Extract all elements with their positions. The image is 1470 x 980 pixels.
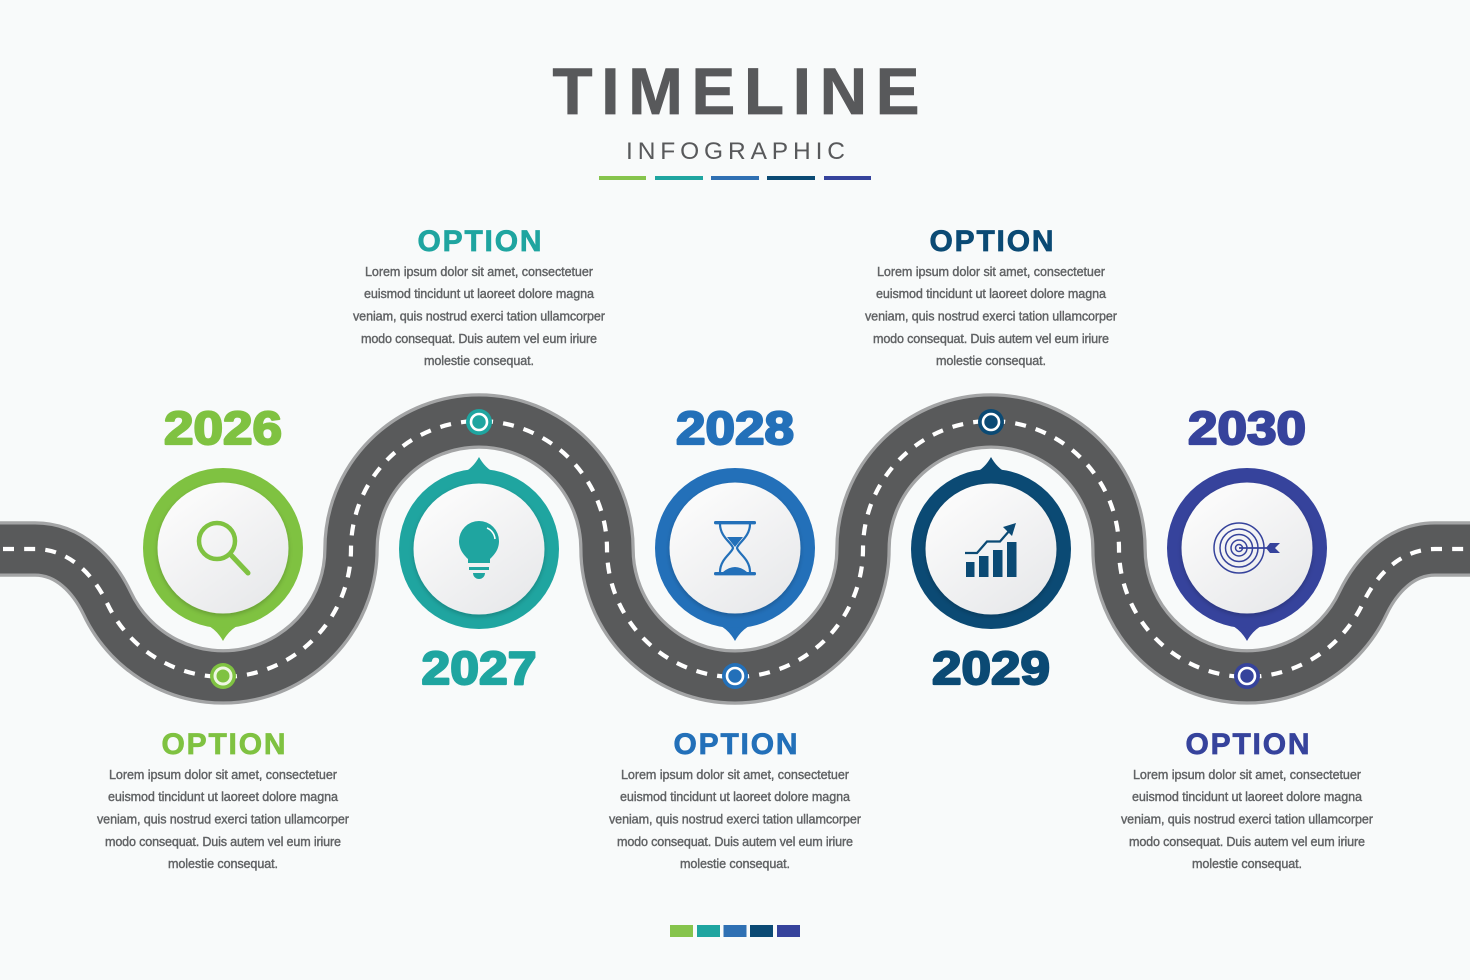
text block: option 2030: OPTION (1186, 728, 1310, 761)
text block: option 2029 (865, 225, 1117, 368)
text block: option 2030: modo consequat. Duis autem vel eum iriure (1129, 835, 1365, 849)
text block: option 2026: modo consequat. Duis autem vel eum iriure (105, 835, 341, 849)
text block: option 2028: Lorem ipsum dolor sit amet, consectetuer (621, 768, 849, 782)
text block: option 2030: veniam, quis nostrud exerci tation ullamcorper (1121, 812, 1373, 826)
year 2029: 2029 (932, 642, 1050, 694)
text block: option 2029: euismod tincidunt ut laoreet dolore magna (876, 287, 1106, 301)
text block: option 2026: veniam, quis nostrud exerci tation ullamcorper (97, 812, 349, 826)
title (552, 55, 920, 165)
footer colour squares (670, 925, 800, 937)
text block: option 2029: veniam, quis nostrud exerci tation ullamcorper (865, 310, 1117, 324)
text block: option 2028: euismod tincidunt ut laoreet dolore magna (620, 790, 850, 804)
icon: hourglass (714, 521, 756, 575)
text block: option 2026: molestie consequat. (168, 857, 278, 871)
text block: option 2028: modo consequat. Duis autem vel eum iriure (617, 835, 853, 849)
text block: option 2026 (97, 728, 349, 871)
road marker 5 (1234, 663, 1260, 689)
text block: option 2027: veniam, quis nostrud exerci tation ullamcorper (353, 310, 605, 324)
pin 2028 (655, 468, 815, 641)
pin 2029 (911, 457, 1071, 629)
icon: growth chart (965, 523, 1016, 577)
title: TIMELINE (552, 55, 920, 128)
text block: option 2028 (609, 728, 861, 871)
icon: light bulb (459, 521, 499, 579)
road marker 3 (722, 663, 748, 689)
text block: option 2028: OPTION (674, 728, 798, 761)
text block: option 2029: molestie consequat. (936, 354, 1046, 368)
text block: option 2027: molestie consequat. (424, 354, 534, 368)
icon: target and arrow (1214, 523, 1280, 573)
text block: option 2030: Lorem ipsum dolor sit amet, consectetuer (1133, 768, 1361, 782)
text block: option 2026: OPTION (162, 728, 286, 761)
text block: option 2030: molestie consequat. (1192, 857, 1302, 871)
text block: option 2027 (353, 225, 605, 368)
text block: option 2028: veniam, quis nostrud exerci tation ullamcorper (609, 812, 861, 826)
winding road (0, 421, 1470, 677)
pin 2026 (143, 468, 303, 641)
road marker 4 (978, 409, 1004, 435)
text block: option 2027: Lorem ipsum dolor sit amet, consectetuer (365, 265, 593, 279)
year 2027: 2027 (422, 642, 536, 694)
year 2026: 2026 (164, 402, 282, 454)
text block: option 2029: OPTION (930, 225, 1054, 258)
text block: option 2027: euismod tincidunt ut laoreet dolore magna (364, 287, 594, 301)
text block: option 2027: modo consequat. Duis autem vel eum iriure (361, 332, 597, 346)
text block: option 2030 (1121, 728, 1373, 871)
year 2028: 2028 (676, 402, 794, 454)
text block: option 2029: Lorem ipsum dolor sit amet, consectetuer (877, 265, 1105, 279)
text block: option 2026: Lorem ipsum dolor sit amet, consectetuer (109, 768, 337, 782)
road marker 2 (466, 409, 492, 435)
pin 2030 (1167, 468, 1327, 641)
year 2030: 2030 (1188, 402, 1306, 454)
text block: option 2026: euismod tincidunt ut laoreet dolore magna (108, 790, 338, 804)
icon: magnifier (199, 523, 248, 573)
text block: option 2030: euismod tincidunt ut laoreet dolore magna (1132, 790, 1362, 804)
pin 2027 (399, 457, 559, 629)
title colour bars (599, 176, 871, 180)
text block: option 2029: modo consequat. Duis autem vel eum iriure (873, 332, 1109, 346)
road marker 1 (210, 663, 236, 689)
subtitle: INFOGRAPHIC (626, 138, 845, 165)
text block: option 2028: molestie consequat. (680, 857, 790, 871)
text block: option 2027: OPTION (418, 225, 542, 258)
